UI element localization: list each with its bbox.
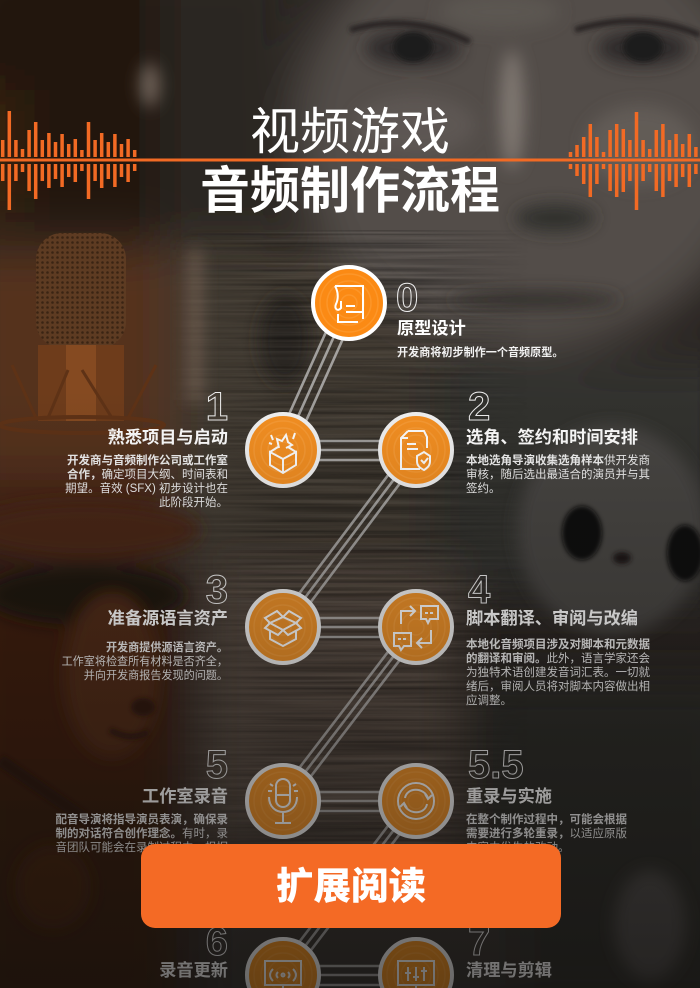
step 5.5 text: 在整个制作过程中，可能会根据需要进行多轮重录，以适应原版内容中发生的改动。 xyxy=(466,814,627,854)
icon: opened box with star xyxy=(269,433,296,473)
microphone xyxy=(0,233,164,433)
right waveform xyxy=(570,112,696,210)
step 1 text: 此阶段开始。 xyxy=(159,497,228,509)
step numbers: 5.5 xyxy=(468,743,524,787)
step numbers: 0 xyxy=(396,276,418,320)
step numbers: 5 xyxy=(206,743,228,787)
step 0 heading: 原型设计 xyxy=(397,318,466,338)
icon: open cardboard box xyxy=(265,611,301,646)
node 6: pickups xyxy=(247,939,319,988)
step 3 heading: 准备源语言资产 xyxy=(108,608,228,628)
step numbers: 7 xyxy=(468,920,490,964)
step 4 text: 本地化音频项目涉及对脚本和元数据的翻译和审阅。此外，语言学家还会为独特术语创建发音词汇表。一切就绪后，审阅人员将对脚本内容做出相应调整。 xyxy=(466,639,650,707)
icon: script page xyxy=(335,286,363,322)
step 6 heading: 录音更新 xyxy=(159,960,228,980)
step 5.5 heading: 重录与实施 xyxy=(466,786,552,806)
node 4: script translation xyxy=(380,591,452,663)
icon: microphone xyxy=(268,779,298,823)
node 7: cleanup and editing xyxy=(380,939,452,988)
waveform header: bars and orange rule xyxy=(0,111,700,210)
step 4 heading: 脚本翻译、审阅与改编 xyxy=(466,608,638,628)
read more button: 扩展阅读 xyxy=(276,865,426,907)
step 1 heading: 熟悉项目与启动 xyxy=(108,427,228,447)
step numbers: 3 xyxy=(206,568,228,612)
step 2 text: 本地选角导演收集选角样本供开发商审核，随后选出最适合的演员并与其签约。 xyxy=(466,455,650,495)
step numbers: 4 xyxy=(468,568,491,612)
step 0 text: 开发商将初步制作一个音频原型。 xyxy=(397,347,563,359)
icon: monitor with sliders xyxy=(398,961,434,988)
read more button xyxy=(141,844,561,928)
step 3 text: 并向开发商报告发现的问题。 xyxy=(84,670,228,682)
step 3 text: 开发商提供源语言资产。 xyxy=(106,642,228,654)
node 1: kickoff xyxy=(247,414,319,486)
node 3: source assets xyxy=(247,591,319,663)
icon: circular arrows xyxy=(398,783,434,819)
step 7 heading: 清理与剪辑 xyxy=(466,960,552,980)
step 3 text xyxy=(62,641,228,682)
icon: monitor with signal xyxy=(265,961,301,988)
step numbers: 1 xyxy=(206,385,228,429)
icon: document with shield xyxy=(401,431,430,470)
step 2 heading: 选角、签约和时间安排 xyxy=(466,427,638,447)
step 5 heading: 工作室录音 xyxy=(142,786,228,806)
step 1 text: 开发商与音频制作公司或工作室 xyxy=(67,455,228,467)
title line 2: 音频制作流程 xyxy=(200,163,500,219)
step 5 text: 配音导演将指导演员表演，确保录制的对话符合创作理念。有时，录音团队可能会在录制过程中，根据 xyxy=(56,814,228,854)
step 3 text: 工作室将检查所有材料是否齐全， xyxy=(62,656,228,668)
step numbers: 6 xyxy=(206,920,228,964)
node 2: casting xyxy=(380,414,452,486)
title xyxy=(200,104,500,219)
title line 1: 视频游戏 xyxy=(250,104,450,160)
step 1 text: 期望。音效 (SFX) 初步设计也在 xyxy=(65,483,228,495)
icon: chat bubbles with arrows xyxy=(394,606,438,650)
step numbers: 2 xyxy=(468,385,490,429)
left waveform xyxy=(3,111,135,210)
node 5: studio recording xyxy=(247,765,319,837)
step 1 text: 合作，确定项目大纲、时间表和 xyxy=(67,469,228,481)
node 0: prototype design xyxy=(313,267,385,339)
node 5.5: retakes xyxy=(380,765,452,837)
step 1 text xyxy=(65,454,228,509)
